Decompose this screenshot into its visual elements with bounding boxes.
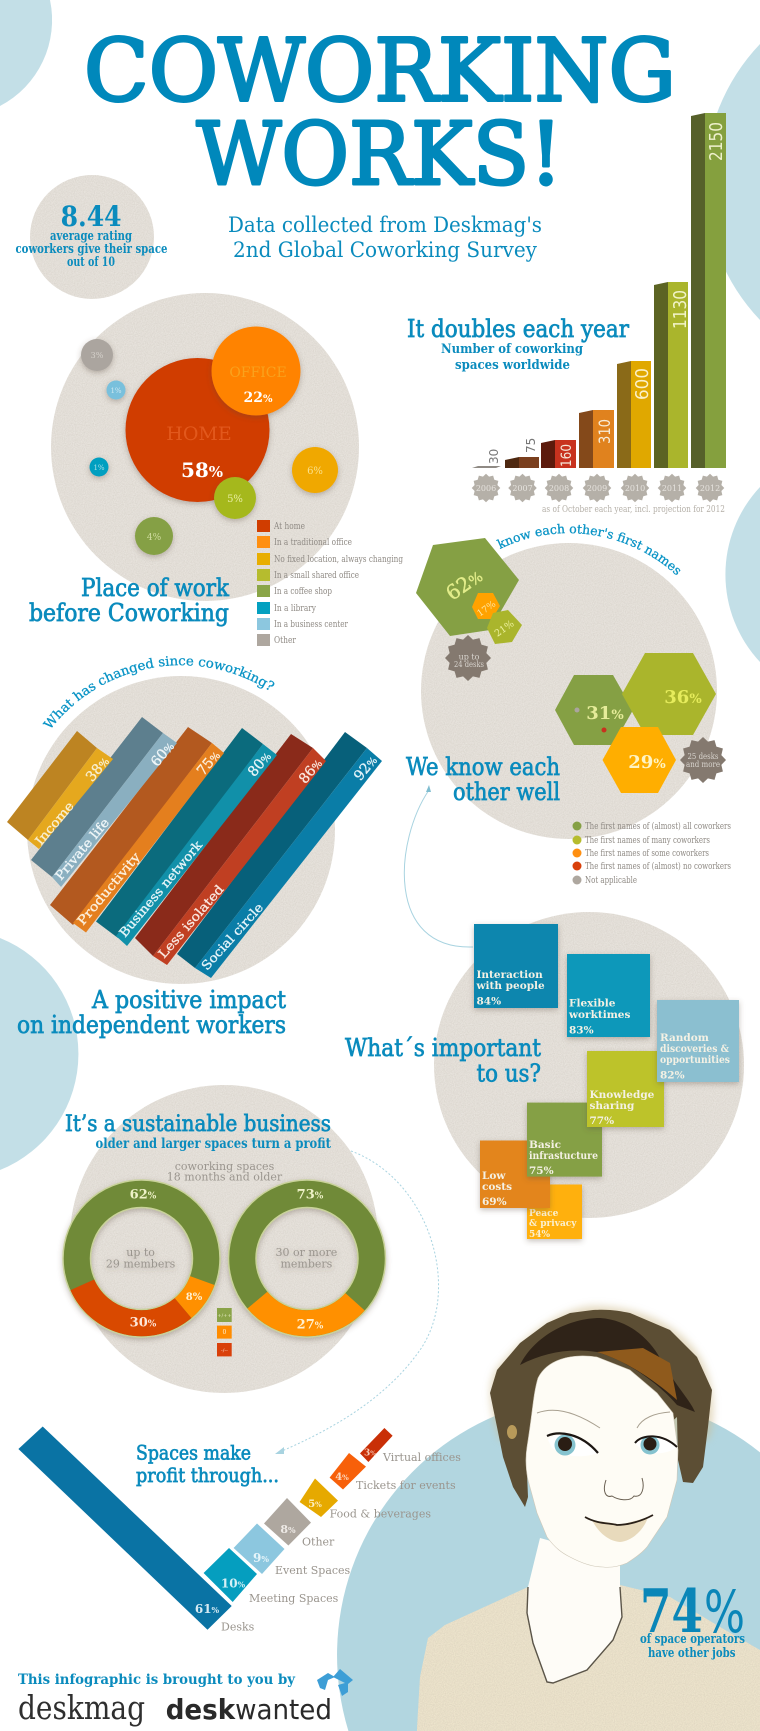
donut: 30 or more members: 73% — [297, 1188, 324, 1203]
bar: productivity 75%: 75% — [194, 748, 224, 779]
bubble: business center 1% — [106, 380, 126, 400]
note: knowledge sharing — [587, 1051, 664, 1127]
sweater — [417, 1585, 760, 1731]
note: interaction with people: Interaction — [476, 969, 543, 981]
logo: deskwanted: deskwanted — [166, 1693, 332, 1726]
bubble: no fixed location 6%: 6% — [307, 466, 323, 477]
note: basic infrastructure: Basic — [529, 1139, 561, 1151]
bar: income 38%: 38% — [83, 754, 113, 785]
hair dark band — [520, 1318, 695, 1412]
bar: virtual offices 3% — [360, 1428, 461, 1464]
bar 2006 — [472, 449, 501, 468]
heading: it doubles each year: spaces worldwide — [455, 358, 570, 373]
bubble: other 3%: 3% — [91, 351, 104, 360]
note: interaction with people: with people — [476, 980, 545, 992]
donut: 30 or more members — [242, 1188, 372, 1333]
stat: 74 percent: % — [704, 1578, 745, 1646]
note: basic infrastructure: infrastucture — [529, 1150, 598, 1162]
legend: place of work: At home — [273, 522, 305, 532]
note: low costs — [480, 1140, 550, 1208]
subtitle — [228, 213, 542, 262]
bar: desks 61% — [18, 1426, 255, 1634]
bar 2011 — [654, 282, 691, 468]
note: interaction with people — [474, 924, 558, 1008]
donut: up to 29 members: 8% — [186, 1292, 203, 1303]
note: peace and privacy: & privacy — [529, 1219, 577, 1229]
bar 2010: 600 — [632, 368, 653, 400]
footer credit: This infographic is brought to you by — [18, 1672, 296, 1688]
icon: deskwanted arrows — [317, 1669, 353, 1696]
heading: what's important: What´s important — [345, 1034, 541, 1062]
bar: private life 60%: 60% — [148, 739, 178, 770]
note: flexible worktimes — [567, 954, 650, 1037]
bar: food and beverages 5% — [300, 1478, 431, 1521]
chart: profit sources — [18, 1426, 461, 1634]
heading: spaces make profit: profit through... — [136, 1463, 279, 1487]
hair — [490, 1310, 712, 1507]
legend: profit: -/-- — [221, 1348, 228, 1354]
bar 2008: 160 — [559, 444, 575, 467]
note: peace and privacy — [527, 1184, 582, 1240]
note: random discoveries: opportunities — [660, 1054, 730, 1066]
bubble: coffee shop 4%: 4% — [147, 533, 162, 543]
year badges: 2010 — [625, 484, 645, 493]
heading: place of work: Place of work — [81, 574, 229, 602]
hexagon 62% — [416, 538, 519, 636]
bar: desks 61%: Desks — [221, 1621, 255, 1634]
heading: it doubles each year — [407, 315, 629, 373]
nose — [604, 1478, 643, 1500]
bar: virtual offices 3%: Virtual offices — [382, 1451, 461, 1464]
caption: 18 months and older — [167, 1171, 283, 1184]
heading: older and larger spaces turn a profit — [96, 1136, 331, 1152]
hexagon 62%: 62% — [441, 563, 487, 605]
donut: up to 29 members — [77, 1188, 206, 1330]
bar: other 8%: Other — [302, 1536, 335, 1548]
bar chart: coworking spaces — [472, 113, 727, 468]
donut: up to 29 members: up to — [126, 1246, 155, 1259]
right eye — [635, 1412, 677, 1454]
badge: 25 desks and more: 25 desks — [688, 752, 718, 761]
badge: 25 desks and more — [680, 737, 726, 783]
panel: sustainable business — [65, 1085, 378, 1393]
hexagon 36%: 36% — [664, 687, 702, 708]
bar: less isolated 86%: Less isolated — [155, 882, 227, 961]
rating badge: coworkers give their space — [16, 242, 168, 257]
legend: profit: +/++ — [217, 1313, 232, 1319]
note: random discoveries: Random — [660, 1032, 709, 1044]
bar: desks 61%: 61% — [195, 1602, 220, 1616]
panel: what's important — [434, 912, 744, 1240]
stat: 74 percent: have other jobs — [648, 1646, 736, 1661]
rating badge — [16, 175, 168, 299]
panel: first names — [416, 524, 726, 839]
note: flexible worktimes: Flexible — [569, 998, 616, 1010]
title — [84, 22, 676, 205]
year badges: 2007 — [512, 484, 533, 493]
heading: spaces make profit: Spaces make — [136, 1441, 251, 1465]
left eye — [537, 1410, 600, 1456]
bar: food and beverages 5%: 5% — [308, 1499, 322, 1510]
arrow: sustainable to profit — [275, 1151, 439, 1454]
note: knowledge sharing: sharing — [590, 1100, 635, 1112]
hexagon 21% — [487, 610, 522, 644]
stat: 74 percent — [640, 1577, 745, 1661]
bar 2009: 310 — [595, 419, 614, 444]
bar 2012 — [691, 113, 727, 468]
donut: 30 or more members: 30 or more — [276, 1246, 337, 1259]
legend: place of work: In a coffee shop — [274, 587, 332, 597]
year badges — [472, 474, 724, 502]
bubble: other 3% — [81, 339, 113, 371]
legend: first names: Not applicable — [585, 876, 637, 886]
donut: up to 29 members: 62% — [130, 1188, 157, 1203]
rating badge: average rating — [50, 229, 132, 244]
bar 2006: 30 — [487, 449, 501, 464]
heading: spaces make profit — [136, 1441, 279, 1487]
legend: place of work: In a library — [274, 604, 317, 614]
bubble: library 1% — [90, 458, 108, 476]
donut: 30 or more members: 27% — [297, 1318, 324, 1333]
bar: less isolated 86% — [135, 734, 326, 965]
badge: up to 24 desks: 24 desks — [454, 660, 484, 669]
curved caption: know each other's first names — [496, 524, 680, 575]
note: basic infrastructure — [527, 1103, 602, 1177]
note: random discoveries: 82% — [660, 1070, 685, 1082]
year badges: 2009 — [587, 484, 607, 493]
bar: private life 60% — [31, 717, 178, 887]
note: interaction with people: 84% — [476, 996, 501, 1008]
caption: coworking spaces — [175, 1160, 275, 1173]
hexagon 31%: 31% — [586, 703, 624, 724]
bar: event spaces 9% — [234, 1524, 351, 1577]
bar: other 8% — [264, 1498, 335, 1548]
bar: business network 80%: 80% — [245, 749, 275, 780]
badge: 25 desks and more: and more — [686, 760, 720, 769]
bar 2007: 75 — [524, 438, 538, 453]
note: knowledge sharing: Knowledge — [590, 1089, 655, 1101]
note: peace and privacy: Peace — [529, 1209, 559, 1219]
neckline — [527, 1587, 622, 1683]
bar 2007 — [505, 438, 539, 468]
bar: event spaces 9%: 9% — [253, 1551, 269, 1565]
bar: income 38% — [7, 731, 113, 849]
bar: social circle 92%: Social circle — [198, 900, 266, 973]
heading: place of work — [29, 574, 229, 627]
note: low costs: 69% — [482, 1196, 507, 1208]
hexagon 21%: 21% — [493, 618, 516, 640]
bar 2011: 1130 — [670, 290, 691, 329]
note: knowledge sharing: 77% — [590, 1115, 614, 1127]
panel: place of work — [51, 293, 359, 601]
bar: tickets for events 4% — [330, 1453, 456, 1492]
donut: 30 or more members: members — [280, 1257, 333, 1270]
note: low costs: Low — [482, 1170, 506, 1182]
legend: first names — [572, 821, 731, 886]
bar: virtual offices 3%: 3% — [364, 1449, 376, 1459]
face — [526, 1356, 678, 1567]
title: WORKS! — [196, 105, 562, 205]
bar: event spaces 9%: Event Spaces — [275, 1564, 351, 1577]
subtitle: Data collected from Deskmag's — [228, 213, 542, 237]
bar: private life 60%: Private life — [52, 815, 112, 883]
illustration: woman portrait — [417, 1306, 760, 1731]
bubble: no fixed location 6% — [292, 447, 338, 493]
bubble: business center 1%: 1% — [110, 387, 122, 395]
logo: deskmag: deskmag — [18, 1688, 145, 1727]
note: random discoveries — [657, 1000, 739, 1082]
bar: less isolated 86%: 86% — [296, 756, 326, 787]
heading: what's important: to us? — [476, 1060, 541, 1088]
bar: meeting spaces 10%: 10% — [221, 1576, 246, 1590]
bar: business network 80% — [96, 728, 277, 946]
year badges: 2008 — [549, 484, 569, 493]
bar 2010 — [617, 361, 653, 468]
bubble: office 22%: OFFICE — [229, 365, 287, 381]
heading: what's important — [345, 1034, 541, 1088]
year badges: 2011 — [662, 484, 682, 493]
heading: place of work: before Coworking — [29, 599, 229, 627]
bubble: home 58% — [126, 358, 270, 502]
mouth — [585, 1515, 653, 1542]
neck — [527, 1538, 622, 1683]
bar: food and beverages 5%: Food & beverages — [330, 1508, 431, 1521]
bubble: home 58%: HOME — [166, 423, 232, 445]
hexagon 36% — [622, 653, 716, 735]
bubble: home 58%: 58% — [181, 458, 223, 482]
legend: place of work: In a business center — [274, 620, 349, 630]
legend: place of work — [257, 520, 403, 646]
hexagon 31% — [555, 675, 633, 745]
note: peace and privacy: 54% — [529, 1230, 551, 1240]
bar: other 8%: 8% — [280, 1523, 296, 1536]
bubble: coffee shop 4% — [135, 517, 173, 555]
legend: profit — [217, 1308, 232, 1356]
heading: we know each other well: We know each — [406, 753, 560, 781]
title: COWORKING — [84, 22, 676, 122]
note: random discoveries: discoveries & — [660, 1043, 729, 1055]
legend: first names: The first names of many coworkers — [585, 836, 710, 846]
subtitle: 2nd Global Coworking Survey — [233, 238, 537, 262]
panel: what has changed — [7, 656, 382, 984]
year badges: 2012 — [700, 484, 720, 493]
ear — [507, 1425, 517, 1439]
bar: tickets for events 4%: Tickets for events — [356, 1479, 456, 1492]
heading: It’s a sustainable business — [65, 1112, 331, 1137]
hexagon 17%: 17% — [476, 599, 498, 619]
chart footnote: as of October each year, incl. projection for 2012 — [542, 505, 725, 515]
bubble: office 22% — [212, 326, 300, 416]
note: flexible worktimes: worktimes — [568, 1009, 630, 1021]
bar 2012: 2150 — [706, 122, 727, 161]
bubble: small shared office 5% — [214, 477, 256, 519]
bar: social circle 92%: 92% — [351, 753, 381, 784]
donut: up to 29 members: 29 members — [106, 1257, 176, 1270]
rating badge: out of 10 — [67, 255, 115, 270]
arrow: we know each other to important — [404, 785, 473, 947]
heading: we know each other well: other well — [453, 778, 560, 806]
legend: place of work: In a traditional office — [274, 538, 352, 548]
bubble: office 22%: 22% — [244, 390, 273, 406]
legend: profit: 0 — [222, 1329, 226, 1336]
bubble: small shared office 5%: 5% — [227, 494, 243, 505]
heading: it doubles each year: Number of coworking — [441, 342, 583, 357]
note: low costs: costs — [482, 1181, 512, 1193]
badge: up to 24 desks: up to — [459, 652, 480, 662]
year badges: 2006 — [476, 484, 496, 493]
hexagon 29%: 29% — [628, 752, 666, 773]
legend: place of work: No fixed location, always changing — [274, 555, 403, 565]
heading — [65, 1112, 331, 1152]
bar 2008 — [541, 440, 576, 468]
heading: we know each other well — [406, 753, 560, 806]
stat: 74 percent: 74 — [640, 1577, 703, 1647]
bar 2009 — [579, 410, 614, 468]
legend: place of work: Other — [274, 636, 297, 646]
bar: productivity 75% — [50, 727, 224, 932]
heading: positive impact — [17, 986, 286, 1039]
curved caption: What has changed since coworking? — [42, 656, 274, 728]
bubble: library 1%: 1% — [93, 464, 105, 472]
legend: place of work: In a small shared office — [274, 571, 359, 581]
bar: business network 80%: Business network — [116, 837, 205, 940]
badge: up to 24 desks — [445, 635, 491, 681]
note: flexible worktimes: 83% — [569, 1024, 594, 1036]
hair highlight — [597, 1348, 677, 1400]
legend: first names: The first names of some coworkers — [585, 849, 709, 859]
hair glow — [490, 1306, 713, 1440]
rating badge: 8.44 — [61, 200, 122, 233]
bar: productivity 75%: Productivity — [74, 849, 144, 928]
bar: social circle 92% — [177, 732, 382, 978]
hexagon 17% — [472, 593, 500, 619]
bar: meeting spaces 10%: Meeting Spaces — [249, 1592, 339, 1605]
heading: positive impact: A positive impact — [91, 986, 286, 1014]
hexagon 29% — [602, 727, 676, 793]
note: basic infrastructure: 75% — [529, 1165, 554, 1177]
bar: income 38%: Income — [32, 798, 77, 848]
heading: positive impact: on independent workers — [17, 1011, 286, 1039]
heading: it doubles each year: It doubles each year — [407, 315, 629, 343]
donut: up to 29 members: 30% — [130, 1316, 157, 1330]
bar: tickets for events 4%: 4% — [335, 1472, 349, 1483]
caption — [167, 1160, 283, 1184]
bar: meeting spaces 10% — [204, 1548, 339, 1605]
